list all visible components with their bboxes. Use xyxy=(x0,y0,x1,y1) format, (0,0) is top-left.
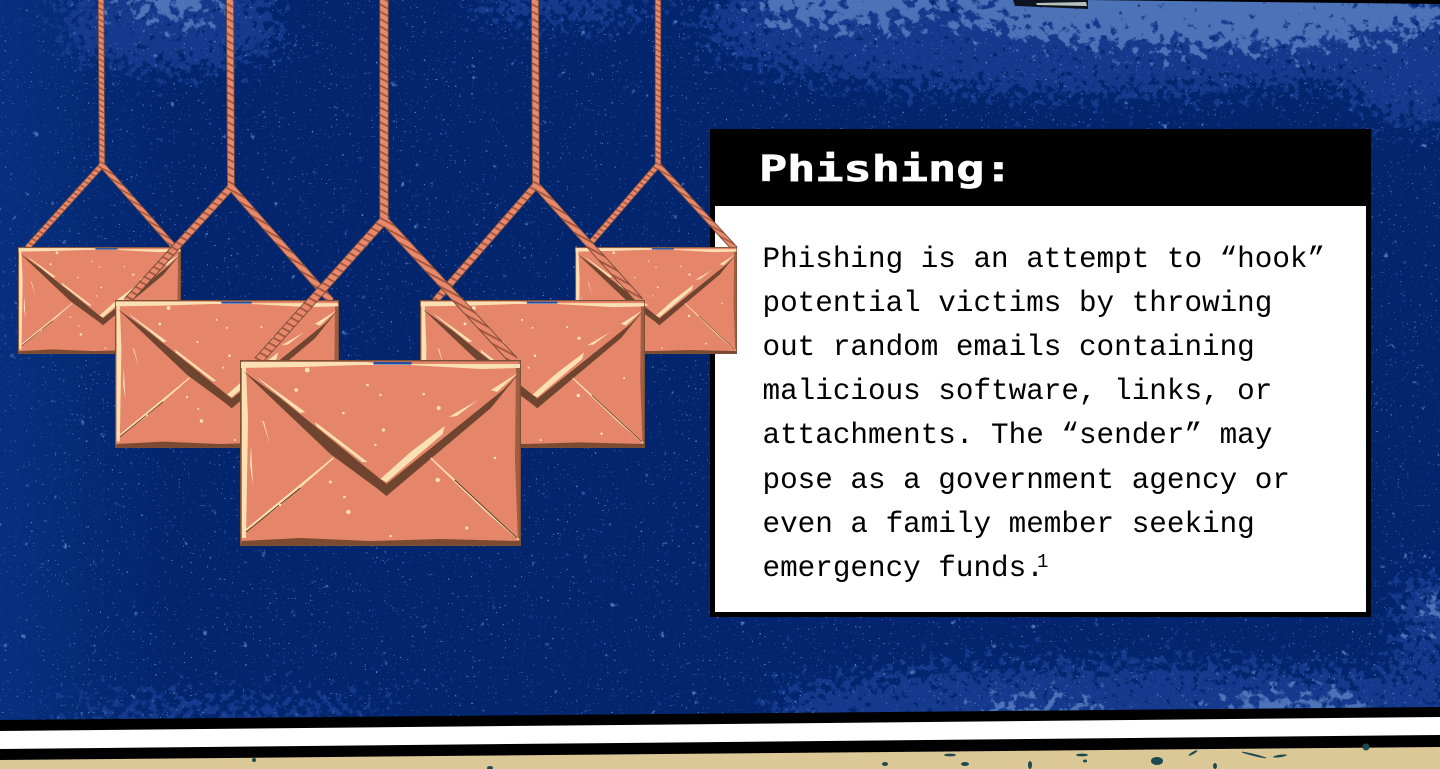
panel: phishing definition xyxy=(710,129,1371,617)
hanging envelope: front centre xyxy=(241,0,520,545)
heading: Phishing: xyxy=(759,147,1013,190)
hanging envelope: middle right xyxy=(421,0,644,447)
body text: out random emails containing xyxy=(762,331,1255,364)
body text: potential victims by throwing xyxy=(762,287,1272,320)
top-right dark edge and object xyxy=(1013,0,1440,9)
bottom stripes: black, white, black and tan ground xyxy=(0,707,1440,769)
hanging envelope: middle left xyxy=(116,0,338,447)
body text: pose as a government agency or xyxy=(762,464,1290,497)
hanging envelope: back right xyxy=(575,0,737,354)
body text: malicious software, links, or xyxy=(762,375,1272,408)
body text: even a family member seeking xyxy=(762,508,1255,541)
body text: emergency funds. xyxy=(762,552,1044,585)
hanging envelope: back left xyxy=(18,0,181,354)
panel body xyxy=(715,206,1366,612)
body text: 1 xyxy=(1037,551,1048,573)
panel frame xyxy=(710,129,1371,617)
body text: attachments. The “sender” may xyxy=(762,419,1272,452)
body text: Phishing is an attempt to “hook” xyxy=(762,243,1325,276)
